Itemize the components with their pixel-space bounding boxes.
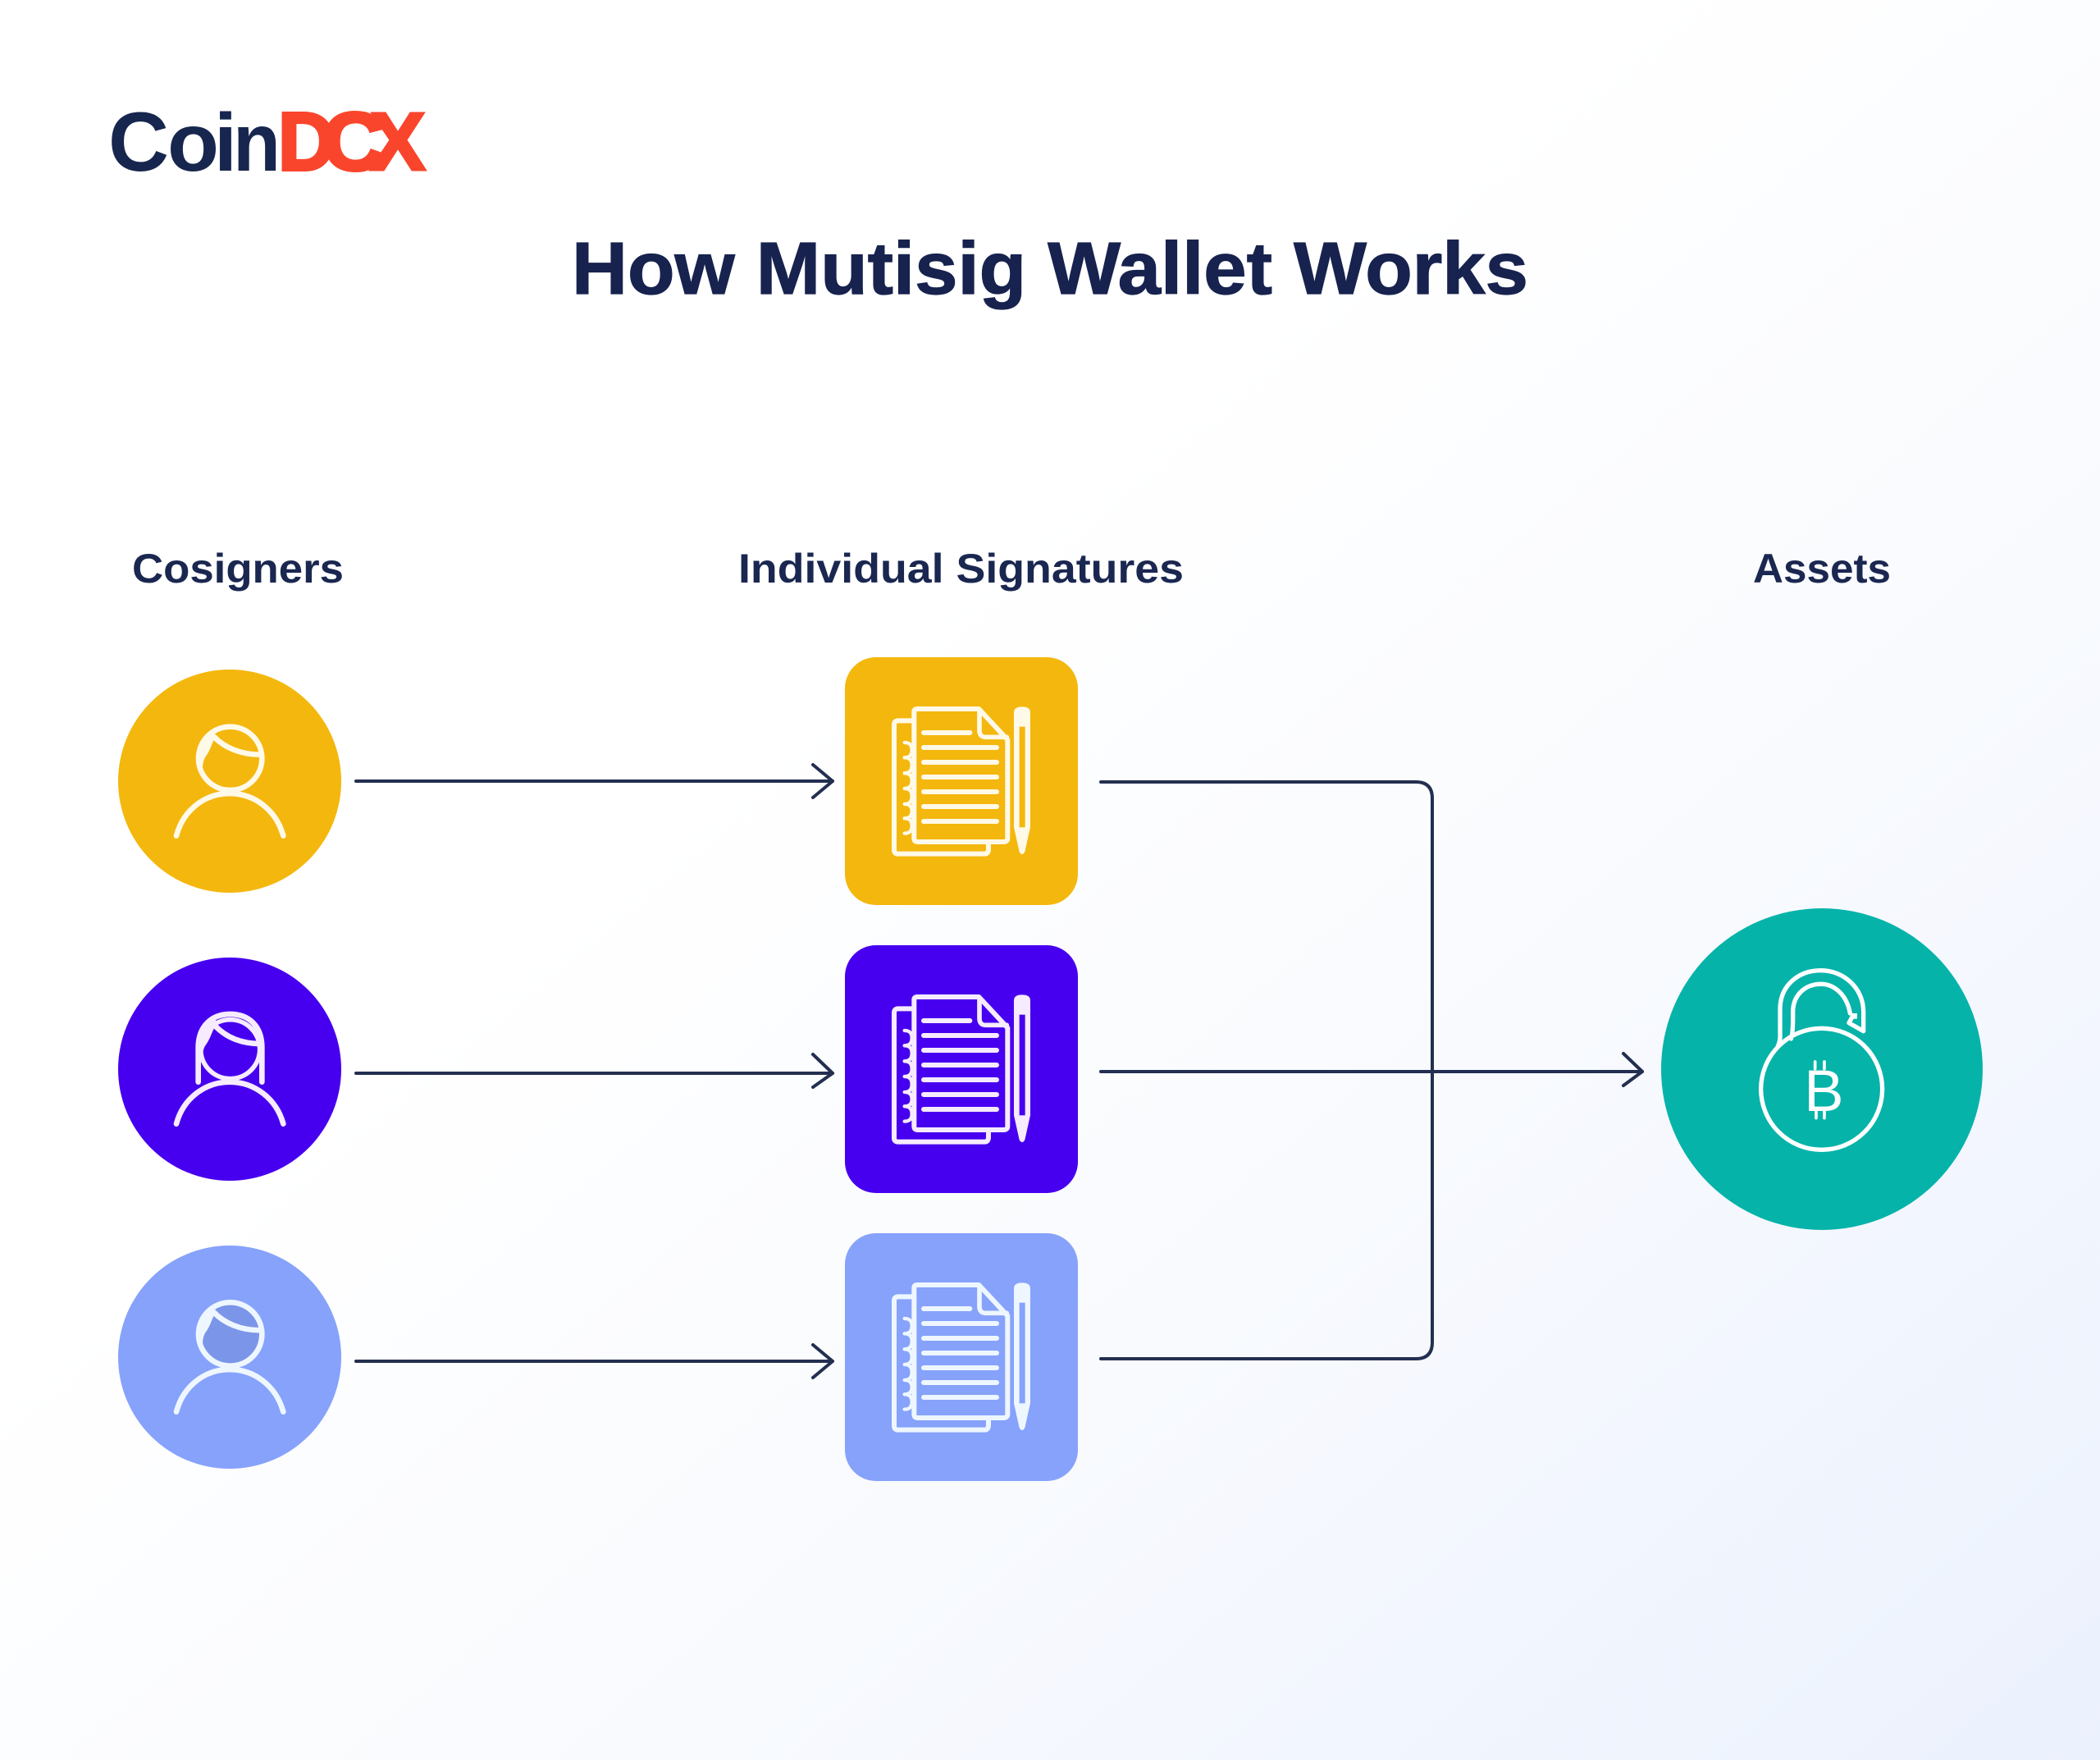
logo: CoinDCX: D: [278, 96, 336, 188]
cosigner 1: yellow circle with person icon: [118, 670, 341, 893]
arrow: signature 2 to assets: [1101, 1054, 1642, 1086]
logo: CoinDCX: [108, 95, 426, 189]
signature 2: purple tile with document and pencil icon: [845, 945, 1078, 1193]
signature 1: yellow tile with document and pencil icon: [845, 657, 1078, 905]
logo: CoinDCX: i: [214, 97, 237, 189]
logo: CoinDCX: X: [370, 96, 426, 188]
arrow: cosigner 2 to signature 2: [356, 1054, 833, 1087]
arrow: cosigner 1 to signature 1: [356, 765, 833, 798]
logo: CoinDCX: C: [108, 95, 169, 189]
cosigner 2: purple circle with person icon: [118, 958, 341, 1181]
cosigner 3: light blue circle with person icon: [118, 1246, 341, 1469]
connector: bracket joining signatures 1 and 3: [1101, 782, 1432, 1359]
assets: teal circle with unlocked bitcoin padlock: B: [1804, 1058, 1844, 1124]
logo: CoinDCX: o: [167, 97, 219, 189]
heading: Individual Signatures: Individual Signatures: [738, 546, 1184, 592]
signature 3: light blue tile with document and pencil icon: [845, 1233, 1078, 1481]
logo: CoinDCX: C: [322, 96, 385, 188]
logo: CoinDCX: n: [233, 97, 281, 189]
title: How Mutisig Wallet Works: [572, 228, 1528, 310]
arrow: cosigner 3 to signature 3: [356, 1345, 833, 1378]
heading: Assets: Assets: [1753, 546, 1891, 592]
assets: teal circle with unlocked bitcoin padlock: [1661, 908, 1983, 1230]
heading: Cosigners: Cosigners: [132, 546, 344, 592]
